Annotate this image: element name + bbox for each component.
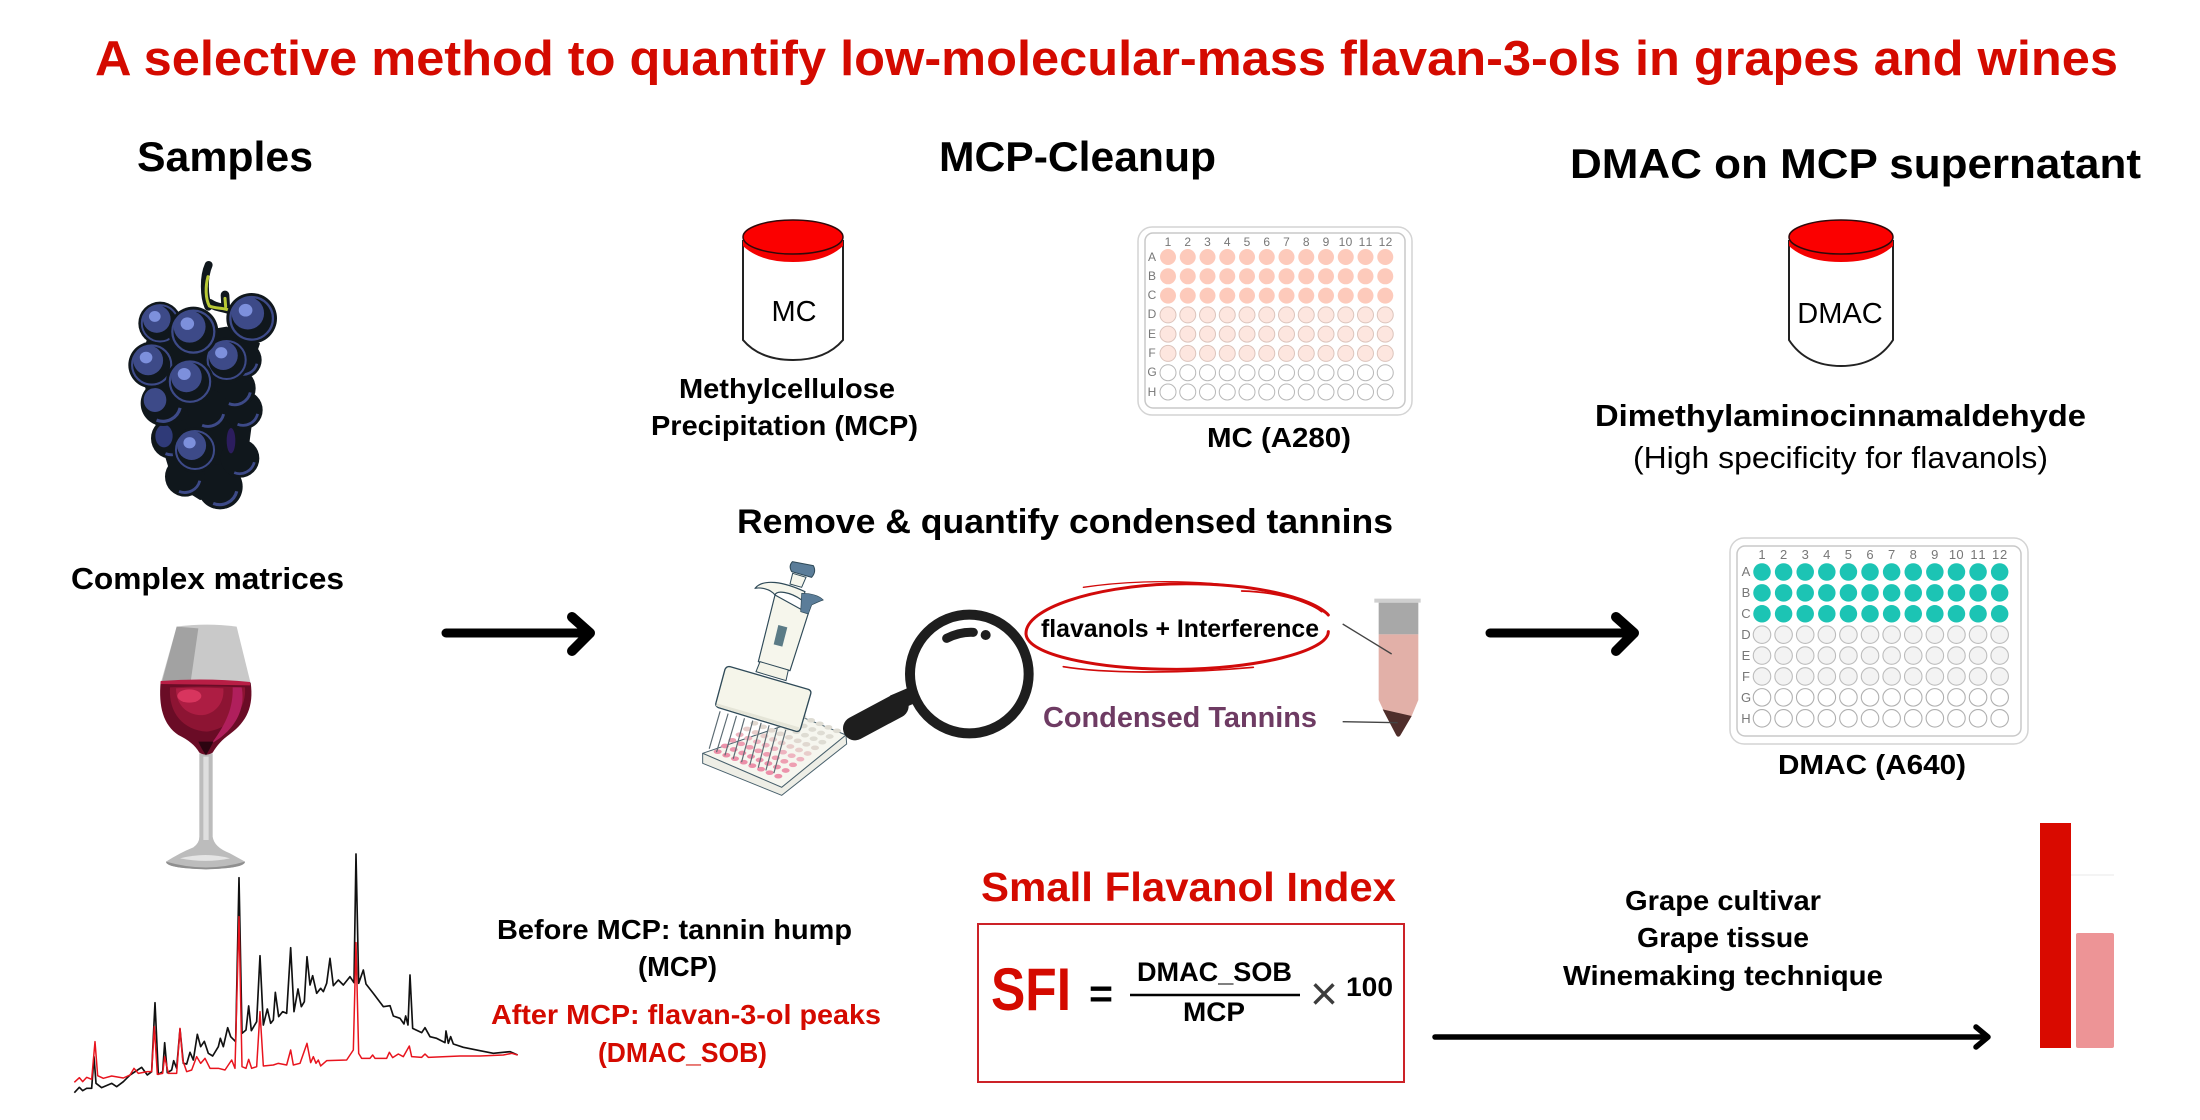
label: DMAC (A640): DMAC (A640): [1778, 749, 1966, 780]
arrow: factors to result: [1435, 1027, 1988, 1047]
text: before MCP: [497, 914, 852, 982]
label: Methylcellulose Precipitation: Methylcellulose: [679, 373, 895, 404]
panel: SFI formula: DMAC_SOB: [1137, 957, 1292, 987]
heading: Small Flavanol Index: Small Flavanol Index: [981, 864, 1396, 910]
icon: centrifuge tube: [1343, 599, 1421, 737]
panel: SFI formula: 100: [1346, 972, 1393, 1002]
icon: grape cluster: [128, 265, 277, 509]
label: Methylcellulose Precipitation: Precipitation (MCP): [651, 410, 918, 441]
plate: MC A280: ABCDEFGH: [1147, 250, 1157, 399]
text: after MCP: (DMAC_SOB): [598, 1037, 767, 1068]
text: before MCP: Before MCP: tannin hump: [497, 914, 852, 945]
text: influencing factors: Grape tissue: [1637, 922, 1809, 953]
panel: SFI formula: ×: [1310, 968, 1338, 1021]
label: Methylcellulose Precipitation: [651, 373, 918, 441]
heading: Remove and quantify condensed tannins: Remove & quantify condensed tannins: [737, 503, 1393, 541]
icon: MC bottle: [743, 220, 843, 360]
label: MC (A280): MC (A280): [1207, 422, 1351, 453]
icon: DMAC bottle: DMAC: [1797, 298, 1883, 330]
text: influencing factors: Grape cultivar: [1625, 885, 1821, 916]
plate: MC A280: 123456789101112: [1165, 235, 1393, 249]
text: after MCP: After MCP: flavan-3-ol peaks: [491, 999, 881, 1030]
label: Complex matrices: Complex matrices: [71, 561, 344, 596]
heading: DMAC on MCP supernatant: DMAC on MCP supernatant: [1570, 140, 2141, 187]
callout: hand-drawn red circle: [1026, 582, 1328, 672]
plate: DMAC A640: 123456789101112: [1758, 547, 2007, 562]
panel: SFI formula: [978, 924, 1404, 1082]
text: after MCP: [491, 999, 881, 1068]
text: influencing factors: [1563, 885, 1883, 991]
panel: SFI formula: MCP: [1183, 997, 1245, 1027]
icon: multichannel pipette over plate: [703, 562, 847, 795]
label: Condensed Tannins: Condensed Tannins: [1043, 702, 1317, 734]
text: high specificity: (High specificity for flavanols): [1633, 440, 2048, 475]
label: Dimethylaminocinnamaldehyde: Dimethylaminocinnamaldehyde: [1595, 398, 2086, 433]
text: influencing factors: Winemaking technique: [1563, 960, 1883, 991]
heading: MCP-Cleanup: MCP-Cleanup: [939, 133, 1216, 180]
arrow: cleanup to DMAC: [1490, 617, 1634, 651]
plate: DMAC A640: [1730, 538, 2028, 744]
icon: magnifying glass: [855, 615, 1029, 733]
heading: Samples: Samples: [137, 133, 313, 180]
panel: SFI formula: SFI: [991, 956, 1071, 1023]
text: before MCP: (MCP): [638, 951, 717, 982]
chart: chromatogram before and after MCP: [74, 854, 518, 1093]
label: flavanols + Interference: flavanols + Interference: [1041, 615, 1319, 643]
plate: DMAC A640: ABCDEFGH: [1741, 564, 1751, 726]
icon: MC bottle: MC: [771, 296, 817, 328]
icon: DMAC bottle: [1789, 220, 1893, 366]
icon: wine glass: [160, 625, 251, 869]
plate: MC A280: [1138, 227, 1412, 415]
bar chart: index result: [2040, 823, 2114, 1048]
arrow: samples to cleanup: [446, 617, 590, 651]
title: A selective method to quantify low-molecular-mass flavan-3-ols in grapes and wines: [95, 32, 2118, 86]
panel: SFI formula: =: [1089, 972, 1113, 1016]
